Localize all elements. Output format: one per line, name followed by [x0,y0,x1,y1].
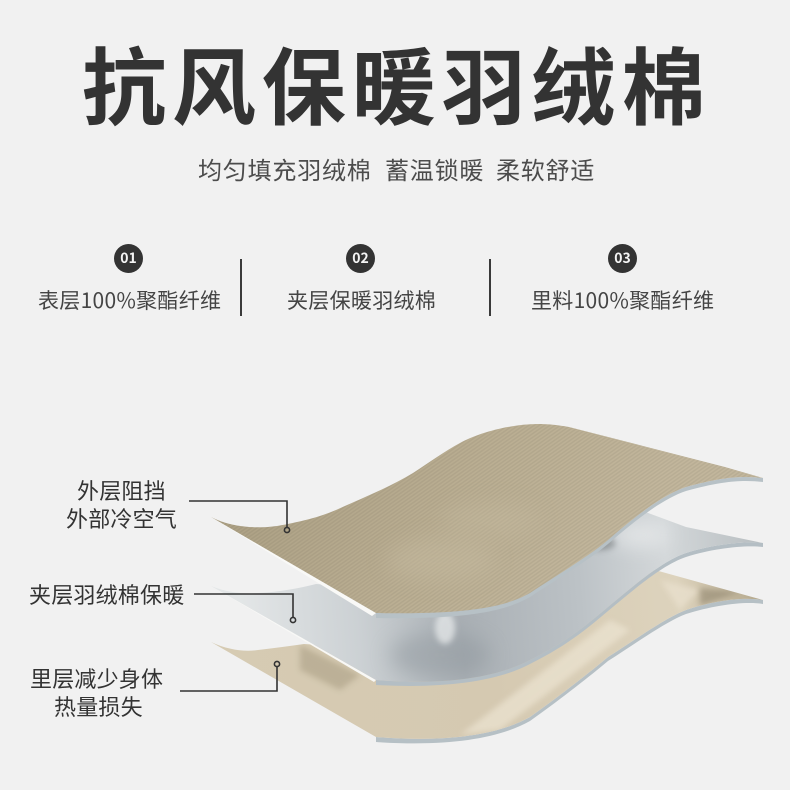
feature 3 [531,244,714,315]
feature 1 [38,244,221,315]
callout leader: outer layer [189,501,290,533]
subtitle part 2: 蓄温锁暖 [385,151,484,186]
top layer: outer shell [212,424,763,618]
number badge 02: 02 [352,248,369,268]
label line 1: 里层减少身体 [30,662,163,694]
number badge 02 [346,244,375,273]
label line 1: 外层阻挡 [77,474,166,506]
middle layer: down padding [211,510,763,686]
divider 1 [240,259,242,316]
subtitle [198,151,595,186]
number badge 03 [608,244,637,273]
number badge 01 [114,244,143,273]
label: middle layer: 夹层羽绒棉保暖 [29,578,184,610]
bottom layer: lining [211,570,763,743]
feature text 2: 夹层保暖羽绒棉 [287,285,436,315]
label line 2: 外部冷空气 [66,502,177,534]
number badge 03: 03 [614,248,631,268]
label: outer layer [66,474,177,534]
title: 抗风保暖羽绒棉 [82,22,711,143]
label: inner layer [30,662,163,722]
divider 2 [489,259,491,316]
subtitle part 1: 均匀填充羽绒棉 [198,151,372,186]
feature 2 [287,244,436,315]
feature text 3: 里料100%聚酯纤维 [531,285,714,315]
number badge 01: 01 [120,248,137,268]
label line 2: 热量损失 [54,690,143,722]
callout leader: middle layer [194,594,296,623]
callout leader: inner layer [180,661,280,691]
fabric layers diagram [180,424,763,744]
feature text 1: 表层100%聚酯纤维 [38,285,221,315]
subtitle part 3: 柔软舒适 [496,151,595,186]
